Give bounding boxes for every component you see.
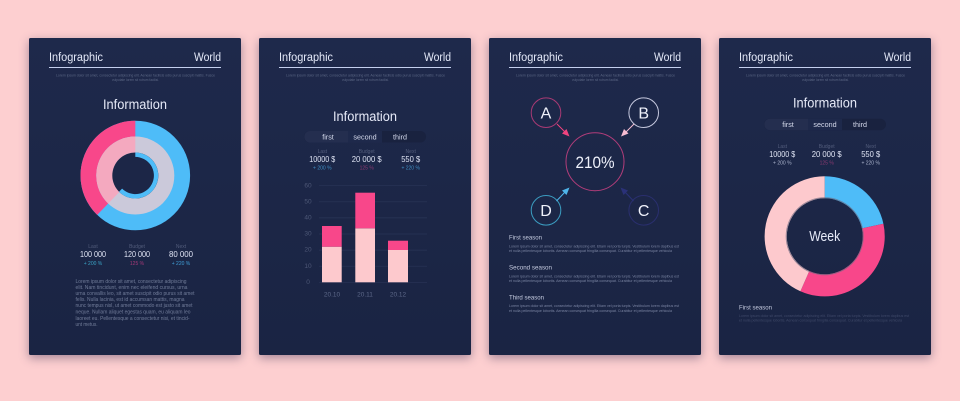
- header: Infographic: [509, 52, 563, 64]
- season texts: Third season: [509, 294, 544, 302]
- chart: stacked bars: 20: [304, 246, 312, 254]
- header: Lorem ipsum dolor sit amet, consectetur adipiscing elit. Aenean facilisis odio purus suscipit mattis. Fusce: [286, 74, 445, 78]
- stats: + 200 %: [313, 166, 332, 172]
- season text: [739, 304, 909, 323]
- header: [509, 52, 681, 82]
- chart: stacked bars: 30: [304, 230, 312, 238]
- stats: 550 $: [401, 154, 420, 164]
- stats: 125 %: [360, 166, 374, 172]
- chart: stacked bars: 40: [304, 214, 312, 222]
- chart: week donut: [765, 176, 885, 296]
- heading: Information: [793, 96, 857, 110]
- season texts: Second season: [509, 264, 552, 272]
- stats: + 220 %: [401, 166, 420, 172]
- season texts: Lorem ipsum dolor sit amet, consectetur adipiscing elit. Etiam vel porta turpis. Vestibulum lorem dapibus est: [509, 244, 679, 248]
- text block: nunc tempus nisl, ut amet commodo est justo sit amet: [76, 303, 193, 309]
- stats: + 220 %: [172, 261, 191, 267]
- header: Lorem ipsum dolor sit amet, consectetur adipiscing elit. Aenean facilisis odio purus suscipit mattis. Fusce: [746, 74, 905, 78]
- stats: 10000 $: [309, 154, 336, 164]
- arrow B: [621, 124, 634, 136]
- text block: felis. Nulla lacinia, est id accumsan mattis, magna: [76, 297, 185, 303]
- text block: elit. Nam tincidunt, enim nec eleifend cursus, urna: [76, 285, 188, 291]
- stats: 20 000 $: [352, 154, 382, 164]
- stats: 125 %: [130, 261, 145, 267]
- tabs: first: [322, 132, 334, 142]
- panel: bar chart: [259, 38, 471, 358]
- stats: [80, 244, 193, 267]
- header: World: [654, 52, 681, 64]
- header: Lorem ipsum dolor sit amet, consectetur adipiscing elit. Aenean facilisis odio purus suscipit mattis. Fusce: [56, 74, 215, 78]
- season texts: Lorem ipsum dolor sit amet, consectetur adipiscing elit. Etiam vel porta turpis. Vestibulum lorem dapibus est: [509, 274, 679, 278]
- season texts: First season: [509, 234, 542, 242]
- stats: Last: [778, 144, 788, 150]
- header: Infographic: [739, 52, 793, 64]
- stats: Last: [318, 149, 328, 155]
- stats: [769, 144, 880, 166]
- header: vulputate lorem sit rutrum facilisi.: [802, 78, 849, 82]
- stats: Budget: [819, 144, 835, 150]
- season texts: [509, 234, 679, 313]
- text block: laoreet eu. Pellentesque a consectetur nisi, et tincid-: [76, 316, 190, 322]
- stats: Last: [88, 244, 98, 250]
- node B: B: [638, 106, 649, 122]
- tabs: [764, 119, 886, 130]
- chart: stacked bars: 20.11: [357, 292, 373, 298]
- header: Infographic: [49, 52, 103, 64]
- header: Infographic: [279, 52, 333, 64]
- chart: week donut: Week: [809, 228, 841, 245]
- heading: Information: [103, 97, 167, 112]
- header: vulputate lorem sit rutrum facilisi.: [112, 78, 159, 82]
- heading: Information: [333, 109, 397, 124]
- chart: stacked bars: 60: [304, 182, 312, 190]
- arrow A: [557, 124, 570, 136]
- stats: + 220 %: [861, 160, 880, 166]
- stats: 550 $: [861, 149, 880, 159]
- center value: 210%: [576, 153, 614, 172]
- stats: [309, 149, 420, 172]
- season texts: et nulla pellentesque lobortis. Aenean consequat fringilla consequat. Curabitur et pellentesque vehicula: [509, 309, 672, 313]
- header: World: [194, 52, 221, 64]
- stats: 80 000: [169, 249, 193, 259]
- panel: ABCD diagram: [489, 38, 701, 358]
- text block: unt metus.: [76, 322, 98, 328]
- node A: A: [541, 106, 552, 122]
- text block: [76, 279, 195, 328]
- tabs: third: [853, 120, 867, 129]
- season text: et nulla pellentesque lobortis. Aenean consequat fringilla consequat. Curabitur et pellentesque vehicula: [739, 319, 902, 323]
- text block: Lorem ipsum dolor sit amet, consectetur adipiscing: [76, 279, 187, 285]
- header: [49, 52, 221, 82]
- stats: Next: [176, 244, 187, 250]
- text block: urna convallis leo, sit amet suscipit odio purus sit amet: [76, 291, 195, 297]
- season text: First season: [739, 304, 772, 311]
- header: vulputate lorem sit rutrum facilisi.: [572, 78, 619, 82]
- stats: 20 000 $: [812, 149, 842, 159]
- text block: neque. Nullam aliquet egestas quam, eu aliquam leo: [76, 310, 191, 316]
- chart: stacked bars: 20.10: [324, 292, 341, 298]
- panel: concentric donut: [29, 38, 241, 358]
- header: World: [884, 52, 911, 64]
- tabs: second: [813, 120, 837, 129]
- season text: Lorem ipsum dolor sit amet, consectetur adipiscing elit. Etiam vel porta turpis. Vestibulum lorem dapibus est: [739, 314, 909, 318]
- tabs: third: [393, 132, 407, 142]
- stats: Next: [866, 144, 876, 150]
- stats: 100 000: [80, 249, 106, 259]
- chart: stacked bars: 20.12: [390, 292, 407, 298]
- arrow C: [620, 188, 634, 201]
- stats: Budget: [129, 244, 146, 250]
- stats: 120 000: [124, 249, 150, 259]
- chart: stacked bars: 50: [304, 198, 312, 206]
- tabs: first: [782, 120, 794, 129]
- header: vulputate lorem sit rutrum facilisi.: [342, 78, 389, 82]
- tabs: [304, 131, 426, 142]
- node C: C: [638, 203, 649, 220]
- header: [279, 52, 451, 82]
- diagram: [531, 98, 658, 225]
- season texts: et nulla pellentesque lobortis. Aenean consequat fringilla consequat. Curabitur et pellentesque vehicula: [509, 249, 672, 253]
- stats: 125 %: [820, 160, 834, 166]
- chart: stacked bars: 0: [306, 279, 310, 286]
- arrow D: [556, 188, 570, 201]
- stats: 10000 $: [769, 149, 796, 159]
- chart: stacked bars: 10: [304, 263, 312, 270]
- tabs: second: [353, 132, 377, 142]
- stats: + 200 %: [773, 160, 792, 166]
- season texts: Lorem ipsum dolor sit amet, consectetur adipiscing elit. Etiam vel porta turpis. Vestibulum lorem dapibus est: [509, 304, 679, 308]
- header: Lorem ipsum dolor sit amet, consectetur adipiscing elit. Aenean facilisis odio purus suscipit mattis. Fusce: [516, 74, 675, 78]
- season texts: et nulla pellentesque lobortis. Aenean consequat fringilla consequat. Curabitur et pellentesque vehicula: [509, 279, 672, 283]
- chart: stacked bars: [304, 182, 427, 298]
- chart: concentric donut: [80, 121, 190, 230]
- stats: + 200 %: [84, 261, 103, 267]
- node D: D: [540, 203, 552, 220]
- header: [739, 52, 911, 82]
- stats: Budget: [359, 149, 375, 155]
- stats: Next: [406, 149, 416, 155]
- panel: week donut: [719, 38, 931, 358]
- header: World: [424, 52, 451, 64]
